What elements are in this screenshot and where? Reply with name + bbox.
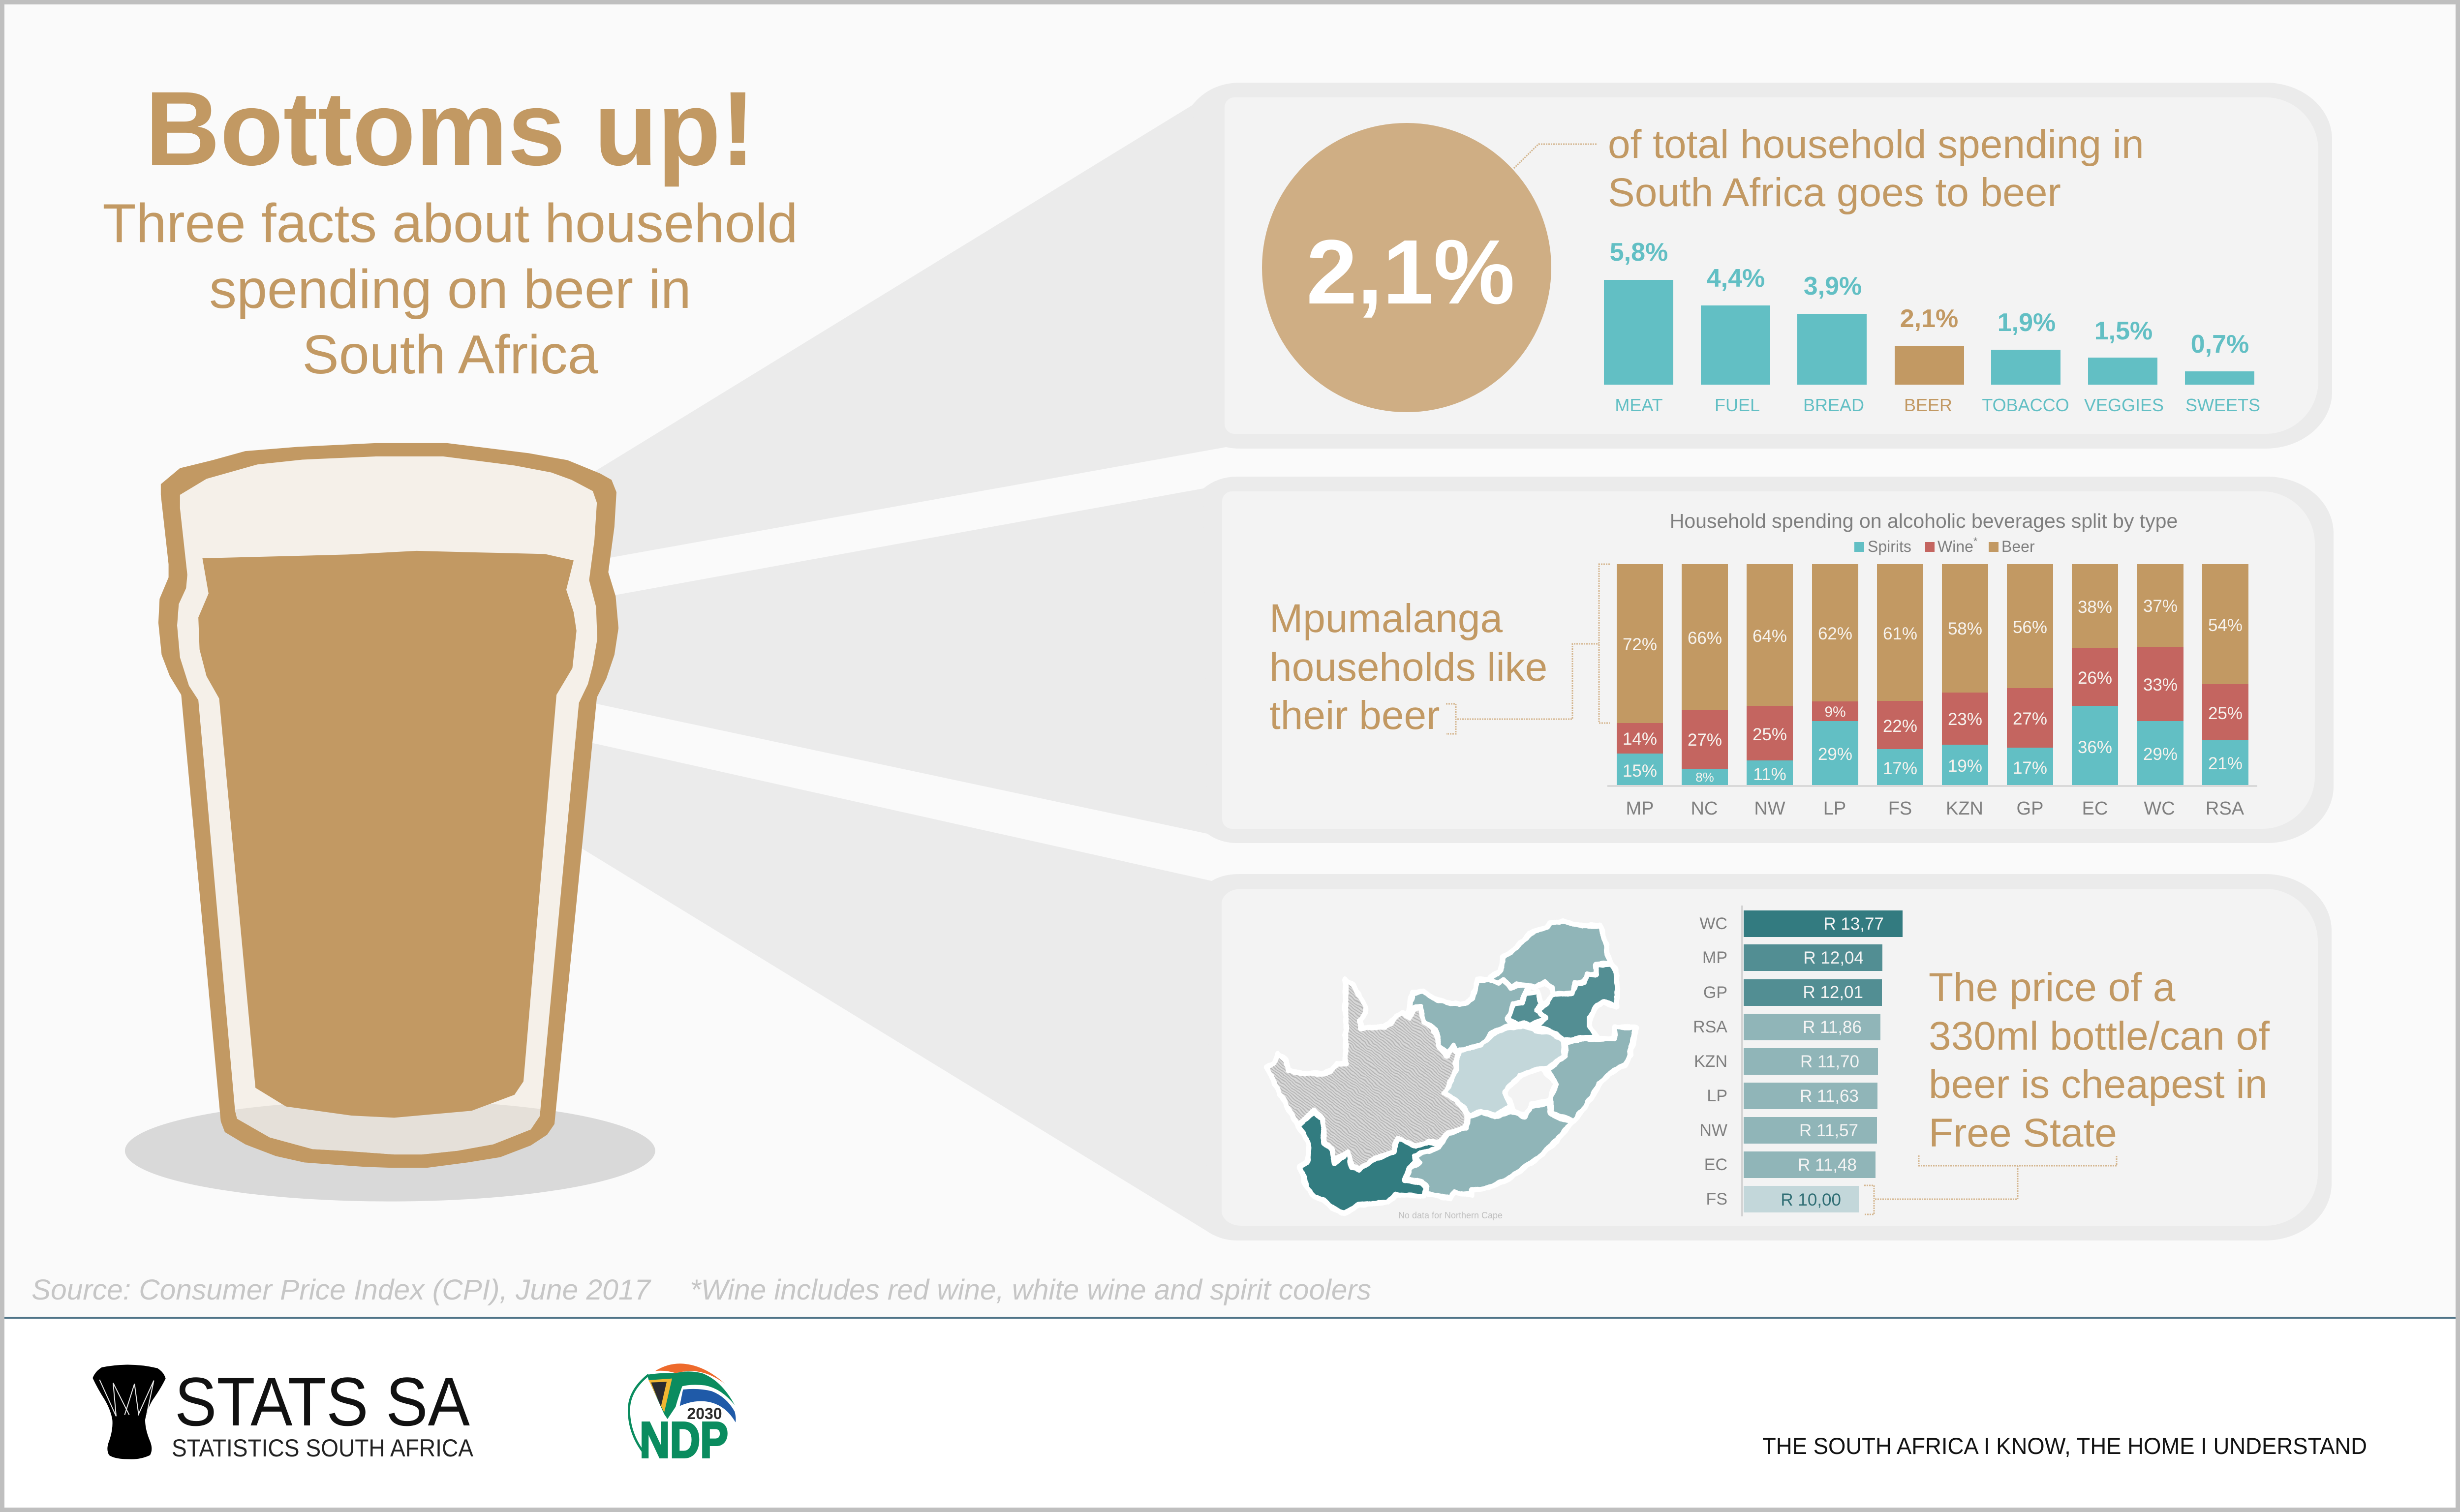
legend: Wine bbox=[1937, 538, 1973, 555]
title: Bottoms up! bbox=[145, 70, 755, 187]
bar chart: spending categories: 4,4% bbox=[1707, 264, 1765, 293]
stacked bar chart: 9% bbox=[1824, 704, 1846, 720]
stacked bar chart: 22% bbox=[1883, 717, 1917, 736]
heading: Mpumalanga: Mpumalanga bbox=[1269, 596, 1503, 641]
bar chart: spending categories: BREAD bbox=[1803, 395, 1864, 415]
bar chart: spending categories: 5,8% bbox=[1610, 238, 1668, 267]
logo: NDP 2030: NDP bbox=[640, 1412, 728, 1468]
bar chart: spending categories: 1,9% bbox=[1998, 308, 2056, 337]
horizontal bar chart: beer prices: WC bbox=[1699, 914, 1727, 933]
stacked bar chart: GP bbox=[2017, 798, 2043, 819]
stacked bar chart: 27% bbox=[1688, 730, 1722, 750]
bar chart: spending categories: FUEL bbox=[1715, 395, 1760, 415]
stacked bar chart: 66% bbox=[1688, 629, 1722, 648]
heading: share of spending: South Africa goes to beer bbox=[1608, 170, 2061, 215]
stacked bar chart: MP bbox=[1626, 798, 1654, 819]
stacked bar chart: 29% bbox=[2143, 745, 2178, 764]
horizontal bar chart: beer prices: KZN bbox=[1694, 1052, 1727, 1071]
logo: NDP 2030 bbox=[629, 1363, 736, 1468]
stacked bar chart: NC bbox=[1691, 798, 1718, 819]
bar chart: spending categories: BEER bbox=[1904, 395, 1952, 415]
map note: No data for Northern Cape bbox=[1398, 1210, 1503, 1220]
logo: Stats SA: STATISTICS SOUTH AFRICA bbox=[172, 1434, 474, 1462]
legend: Beer bbox=[2001, 538, 2035, 555]
horizontal bar chart: beer prices: NW bbox=[1699, 1121, 1727, 1140]
source note: *Wine includes red wine, white wine and spirit coolers bbox=[690, 1274, 1371, 1306]
callout bracket bbox=[1446, 564, 1610, 734]
bar chart: spending categories bbox=[1604, 238, 2260, 415]
stacked bar chart: 61% bbox=[1883, 624, 1917, 643]
stacked bar chart: 19% bbox=[1948, 756, 1982, 776]
logo: NDP 2030: 2030 bbox=[687, 1405, 722, 1422]
tagline: THE SOUTH AFRICA I KNOW, THE HOME I UNDERSTAND bbox=[1762, 1433, 2367, 1459]
bar chart: spending categories: 0,7% bbox=[2191, 330, 2249, 359]
stacked bar chart: 36% bbox=[2078, 738, 2112, 757]
ray to panel 2 bbox=[581, 488, 1279, 834]
horizontal bar chart: beer prices: FS bbox=[1706, 1190, 1727, 1209]
horizontal bar chart: beer prices: R 12,01 bbox=[1803, 983, 1863, 1002]
horizontal bar chart: beer prices: R 10,00 bbox=[1781, 1190, 1841, 1210]
source note: Source: Consumer Price Index (CPI), June 2017 bbox=[31, 1274, 652, 1306]
stacked bar chart: 25% bbox=[1753, 725, 1787, 744]
heading: cheapest in Free State bbox=[1929, 965, 2270, 1155]
bar chart: spending categories: 2,1% bbox=[1900, 304, 1958, 333]
stacked bar chart: 25% bbox=[2208, 704, 2243, 723]
horizontal bar chart: beer prices: R 12,04 bbox=[1803, 948, 1864, 968]
heading: cheapest in Free State: 330ml bottle/can of bbox=[1929, 1014, 2270, 1058]
heading: Mpumalanga bbox=[1269, 596, 1547, 738]
stacked bar chart: 33% bbox=[2143, 675, 2178, 695]
stacked bar chart: 72% bbox=[1623, 635, 1657, 654]
stacked bar chart: KZN bbox=[1946, 798, 1983, 819]
logo: Stats SA bbox=[92, 1363, 474, 1462]
horizontal bar chart: beer prices: R 11,70 bbox=[1800, 1052, 1859, 1071]
icon: beer glass bbox=[125, 443, 655, 1202]
stacked bar chart: 23% bbox=[1948, 710, 1982, 729]
stacked bar chart: 27% bbox=[2013, 709, 2047, 728]
horizontal bar chart: beer prices: RSA bbox=[1693, 1018, 1727, 1036]
stacked bar chart: WC bbox=[2144, 798, 2175, 819]
ray to panel 1 bbox=[581, 105, 1279, 561]
panel: share of household spending bbox=[1192, 83, 2332, 449]
stacked bar chart: 38% bbox=[2078, 598, 2112, 617]
horizontal bar chart: beer prices: R 11,86 bbox=[1803, 1018, 1862, 1037]
bar chart: spending categories: 3,9% bbox=[1804, 272, 1862, 301]
stacked bar chart: 58% bbox=[1948, 619, 1982, 638]
logo: Stats SA: STATS SA bbox=[175, 1363, 470, 1440]
stacked bar chart: FS bbox=[1888, 798, 1912, 819]
stacked bar chart: 26% bbox=[2078, 668, 2112, 688]
callout leader bbox=[1514, 144, 1598, 168]
stacked bar chart: RSA bbox=[2206, 798, 2245, 819]
legend bbox=[1854, 535, 2035, 555]
stacked bar chart: 62% bbox=[1818, 624, 1852, 643]
heading: cheapest in Free State: beer is cheapest in bbox=[1929, 1062, 2267, 1107]
callout bracket bbox=[1864, 1155, 2117, 1214]
heading: Mpumalanga: their beer bbox=[1269, 693, 1440, 738]
stacked bar chart: 64% bbox=[1753, 627, 1787, 646]
stacked bar chart: 17% bbox=[2013, 758, 2047, 778]
horizontal bar chart: beer prices: R 13,77 bbox=[1823, 914, 1884, 934]
horizontal bar chart: beer prices: EC bbox=[1704, 1155, 1727, 1174]
icon: drum bbox=[92, 1365, 166, 1459]
bar chart: spending categories: 1,5% bbox=[2094, 317, 2152, 345]
subtitle: spending on beer in bbox=[209, 258, 691, 320]
bar chart: spending categories: MEAT bbox=[1615, 395, 1663, 415]
panel: beer price by province bbox=[1205, 874, 2332, 1240]
bar chart: spending categories: SWEETS bbox=[2185, 395, 2260, 415]
stacked bar chart: 17% bbox=[1883, 759, 1917, 778]
stacked bar chart: 14% bbox=[1623, 729, 1657, 749]
heading: share of spending bbox=[1608, 122, 2144, 215]
stacked bar chart: 15% bbox=[1623, 761, 1657, 781]
source note bbox=[31, 1274, 1371, 1306]
circle: 2,1%: 2,1% bbox=[1306, 221, 1515, 323]
stacked bar chart: EC bbox=[2082, 798, 2108, 819]
subtitle: Three facts about household bbox=[102, 192, 798, 254]
stacked bar chart bbox=[1607, 564, 2257, 819]
stacked bar chart: 56% bbox=[2013, 618, 2047, 637]
horizontal bar chart: beer prices: MP bbox=[1702, 948, 1727, 967]
horizontal bar chart: beer prices bbox=[1693, 906, 1903, 1216]
chart title: Household spending on alcoholic beverages split by type bbox=[1670, 510, 2178, 532]
heading: cheapest in Free State: The price of a bbox=[1929, 965, 2176, 1010]
ray to panel 3 bbox=[566, 739, 1279, 1230]
heading: share of spending: of total household spending in bbox=[1608, 122, 2144, 167]
stacked bar chart: 11% bbox=[1753, 765, 1786, 784]
stacked bar chart: 29% bbox=[1818, 745, 1852, 764]
stacked bar chart: 37% bbox=[2143, 597, 2178, 616]
horizontal bar chart: beer prices: R 11,48 bbox=[1798, 1155, 1857, 1175]
stacked bar chart: LP bbox=[1823, 798, 1846, 819]
stacked bar chart: NW bbox=[1754, 798, 1785, 819]
horizontal bar chart: beer prices: R 11,63 bbox=[1800, 1087, 1859, 1106]
horizontal bar chart: beer prices: LP bbox=[1707, 1087, 1727, 1105]
horizontal bar chart: beer prices: GP bbox=[1703, 983, 1727, 1002]
stacked bar chart: 8% bbox=[1695, 770, 1714, 785]
bar chart: spending categories: VEGGIES bbox=[2084, 395, 2164, 415]
legend: * bbox=[1973, 535, 1978, 547]
heading: cheapest in Free State: Free State bbox=[1929, 1111, 2117, 1155]
horizontal bar chart: beer prices: R 11,57 bbox=[1799, 1121, 1858, 1140]
stacked bar chart: 21% bbox=[2208, 754, 2243, 773]
bar chart: spending categories: TOBACCO bbox=[1982, 395, 2069, 415]
map: South Africa provinces bbox=[1266, 921, 1636, 1213]
subtitle: South Africa bbox=[302, 324, 599, 385]
panel: alcoholic beverages split bbox=[1203, 477, 2334, 843]
heading: Mpumalanga: households like bbox=[1269, 645, 1547, 690]
stacked bar chart: 54% bbox=[2208, 616, 2243, 635]
subtitle bbox=[102, 192, 798, 385]
circle: 2,1% bbox=[1262, 123, 1551, 412]
legend: Spirits bbox=[1868, 538, 1911, 555]
